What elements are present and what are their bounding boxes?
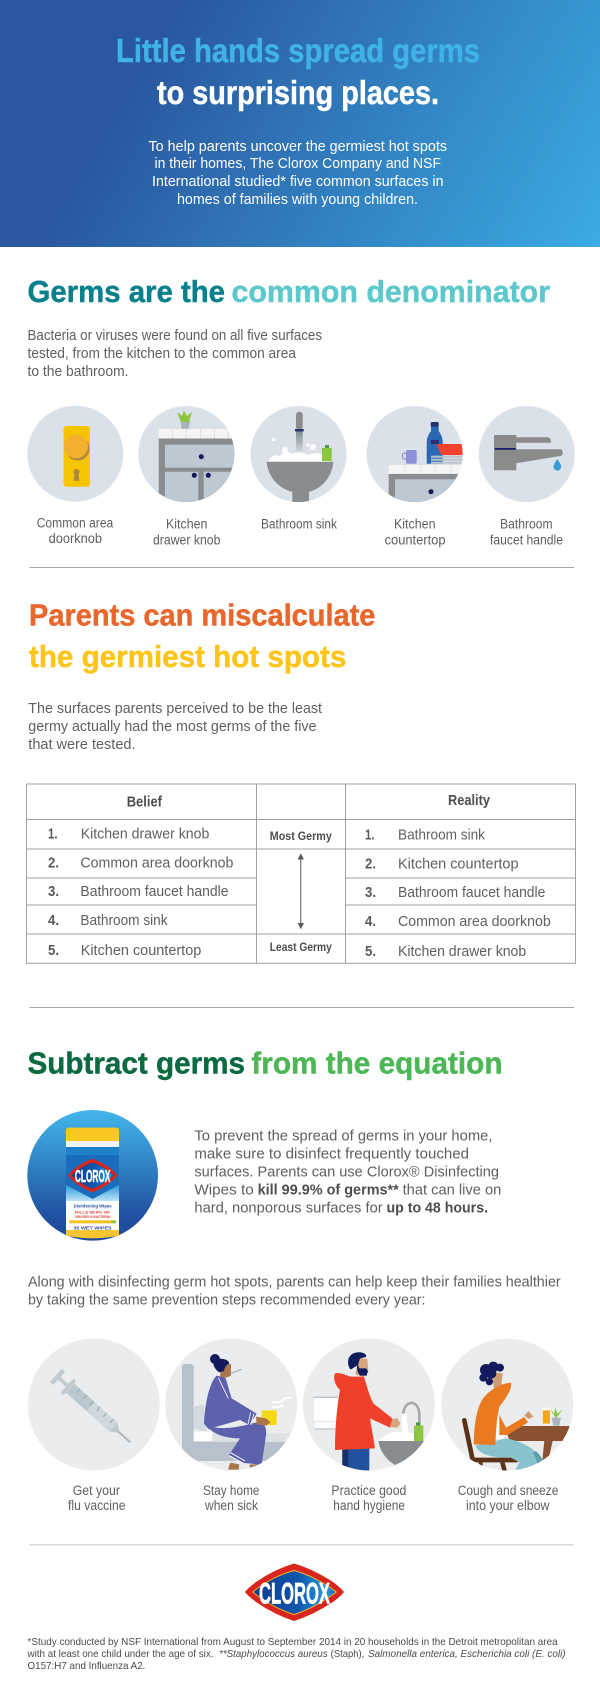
text: to prevent the spread: that can live on [403,1182,501,1198]
footnote: *Study conducted by NSF International from August to September 2014 in 20 households in the Detroit metropolitan area [28,1636,558,1648]
labels: prevention steps: Stay home [203,1483,260,1498]
reality rows: Common area doorknob [398,914,551,930]
icon: man washing hands [303,1338,435,1472]
text: bacteria or viruses [28,328,322,380]
labels: five surfaces: Bathroom sink [261,517,337,532]
text: to prevent the spread: up to 48 hours. [386,1200,488,1216]
text: along with disinfecting: by taking the same prevention steps recommended every year: [28,1293,426,1309]
text: to prevent the spread: Wipes to [194,1182,254,1198]
labels: prevention steps: flu vaccine [68,1498,126,1513]
belief rows: Common area doorknob [80,855,233,871]
icon: bathroom sink [251,406,347,502]
text: to prevent the spread: make sure to disinfect frequently touched [194,1146,469,1162]
text: bacteria or viruses: tested, from the kitchen to the common area [28,346,297,362]
labels: five surfaces [37,516,563,548]
hand [256,1417,271,1426]
reality rows: Kitchen drawer knob [398,944,526,960]
icon: person home sick in bed [165,1338,297,1470]
hair [479,1362,504,1385]
chair [464,1420,473,1460]
label: most germy: Most Germy [270,831,332,843]
table: belief vs reality [26,784,576,963]
icon: flu vaccine syringe [28,1338,160,1470]
icon: kitchen drawer knob [138,406,239,506]
text: along with disinfecting [28,1275,561,1309]
labels: five surfaces: Bathroom [500,517,553,532]
labels: five surfaces: drawer knob [153,533,220,548]
footnote: Salmonella enterica, Escherichia coli (E. coli) [368,1648,566,1660]
labels: five surfaces: Kitchen [394,517,436,532]
label: least germy: Least Germy [270,942,332,954]
belief rows: Bathroom sink [80,913,168,929]
intro paragraph: To help parents uncover the germiest hot spots [148,139,447,155]
reality rows: 1. [365,827,374,843]
head [492,1372,503,1388]
icon: person coughing into elbow [441,1338,573,1472]
hoodie [334,1373,392,1450]
text: surfaces parents perceived [28,701,322,753]
hand [524,1411,533,1419]
logo: clorox: CLOROX [259,1577,330,1610]
labels: five surfaces: doorknob [49,531,102,546]
belief rows: 4. [48,913,59,929]
belief rows: 3. [48,884,59,900]
reality rows: Kitchen countertop [398,856,518,872]
text: surfaces parents perceived: The surfaces parents perceived to be the least [28,701,322,717]
text: to prevent the spread: hard, nonporous surfaces for [194,1200,383,1216]
legs [475,1438,543,1472]
shirt [496,1415,504,1439]
labels: prevention steps: Get your [73,1483,120,1498]
labels: five surfaces: Kitchen [166,517,207,532]
footnote: **Staphylococcus aureus [219,1648,328,1660]
main title: Little hands spread germs [116,32,480,69]
text: to prevent the spread: surfaces. Parents can use Clorox® Disinfecting [194,1164,499,1180]
labels: prevention steps: when sick [204,1498,258,1513]
footnote: O157:H7 and Influenza A2. [28,1660,145,1672]
text: surfaces parents perceived: germy actually had the most germs of the five [28,719,317,735]
heading: parents can miscalculate: the germiest hot spots [29,639,346,674]
heading: germs are the common denominator: common denominator [232,274,550,309]
product: disinfecting wipes canister [27,1110,158,1241]
reality rows: 3. [365,885,376,901]
head [220,1362,231,1378]
labels: five surfaces: countertop [385,533,446,548]
belief rows: Kitchen countertop [81,943,201,959]
intro paragraph: in their homes, The Clorox Company and NSF [154,156,441,172]
labels: prevention steps: Cough and sneeze [458,1483,558,1498]
icon: common area doorknob [27,406,123,502]
labels: five surfaces: faucet handle [490,533,563,548]
reality rows: Bathroom faucet handle [398,885,545,901]
labels: prevention steps: hand hygiene [333,1498,405,1513]
product: disinfecting wipes canister: KILLS 99.9% OF [75,1210,111,1215]
hand [391,1418,401,1428]
heading: subtract germs [28,1045,502,1080]
heading: germs are the common denominator: Germs are the [28,274,225,309]
reality rows: 4. [365,914,376,930]
icon: kitchen countertop [367,406,465,506]
labels: five surfaces: Common area [37,516,114,530]
logo on canister: CLOROX [75,1167,110,1186]
header banner [0,0,600,247]
mug [262,1410,277,1425]
faucet [403,1403,419,1432]
feet [228,1463,239,1470]
main title: to surprising places. [157,74,439,111]
text: to prevent the spread [194,1128,501,1216]
pajama legs [205,1422,266,1465]
intro paragraph: homes of families with young children. [177,192,418,208]
text: bacteria or viruses: to the bathroom. [28,364,128,380]
heading: subtract germs: Subtract germs [28,1045,245,1080]
pajama top [204,1376,257,1429]
footnote: (Staph), [331,1648,364,1660]
intro paragraph [148,139,447,208]
reality rows: 2. [365,856,376,872]
sweater arm and body [499,1415,528,1435]
text: along with disinfecting: Along with disinfecting germ hot spots, parents can help keep their families healthier [28,1275,561,1291]
labels: prevention steps [68,1483,558,1513]
labels: prevention steps: into your elbow [466,1498,550,1513]
footnote: with at least one child under the age of six. [27,1648,214,1660]
table header: belief: Belief [127,795,162,811]
footnote [27,1636,566,1672]
logo: clorox [245,1564,344,1621]
product: disinfecting wipes canister: VIRUSES & BACTERIA [75,1214,110,1219]
belief rows [48,826,233,959]
labels: prevention steps: Practice good [331,1483,406,1498]
heading: germs are the common denominator [28,274,550,309]
text: bacteria or viruses: Bacteria or viruses were found on all five surfaces [28,328,322,344]
text: to prevent the spread: kill 99.9% of germs** [258,1182,399,1198]
belief rows: Kitchen drawer knob [81,826,209,842]
heading: subtract germs: from the equation [251,1045,502,1080]
pants [342,1448,369,1472]
text: surfaces parents perceived: that were tested. [28,737,135,753]
reality rows: 5. [365,944,376,960]
belief rows: 5. [48,943,59,959]
table [507,1426,571,1463]
reality rows: Bathroom sink [398,827,486,843]
text: to prevent the spread: To prevent the spread of germs in your home, [194,1128,492,1144]
intro paragraph: International studied* five common surfaces in [152,174,444,190]
belief rows: Bathroom faucet handle [80,884,229,900]
belief rows: 2. [48,855,59,871]
reality rows [365,827,551,960]
main title [116,32,480,111]
head [355,1358,368,1377]
product: disinfecting wipes canister: Disinfecting Wipes [74,1203,112,1208]
heading: parents can miscalculate: Parents can miscalculate [29,598,375,633]
icon: bathroom faucet handle [479,406,575,502]
arrow: germ scale [298,853,304,929]
heading: parents can miscalculate [29,598,375,674]
belief rows: 1. [48,826,58,842]
glass and plant [542,1408,551,1424]
product: disinfecting wipes canister: 35 WET WIPES [73,1226,112,1231]
table header: reality: Reality [448,793,490,809]
